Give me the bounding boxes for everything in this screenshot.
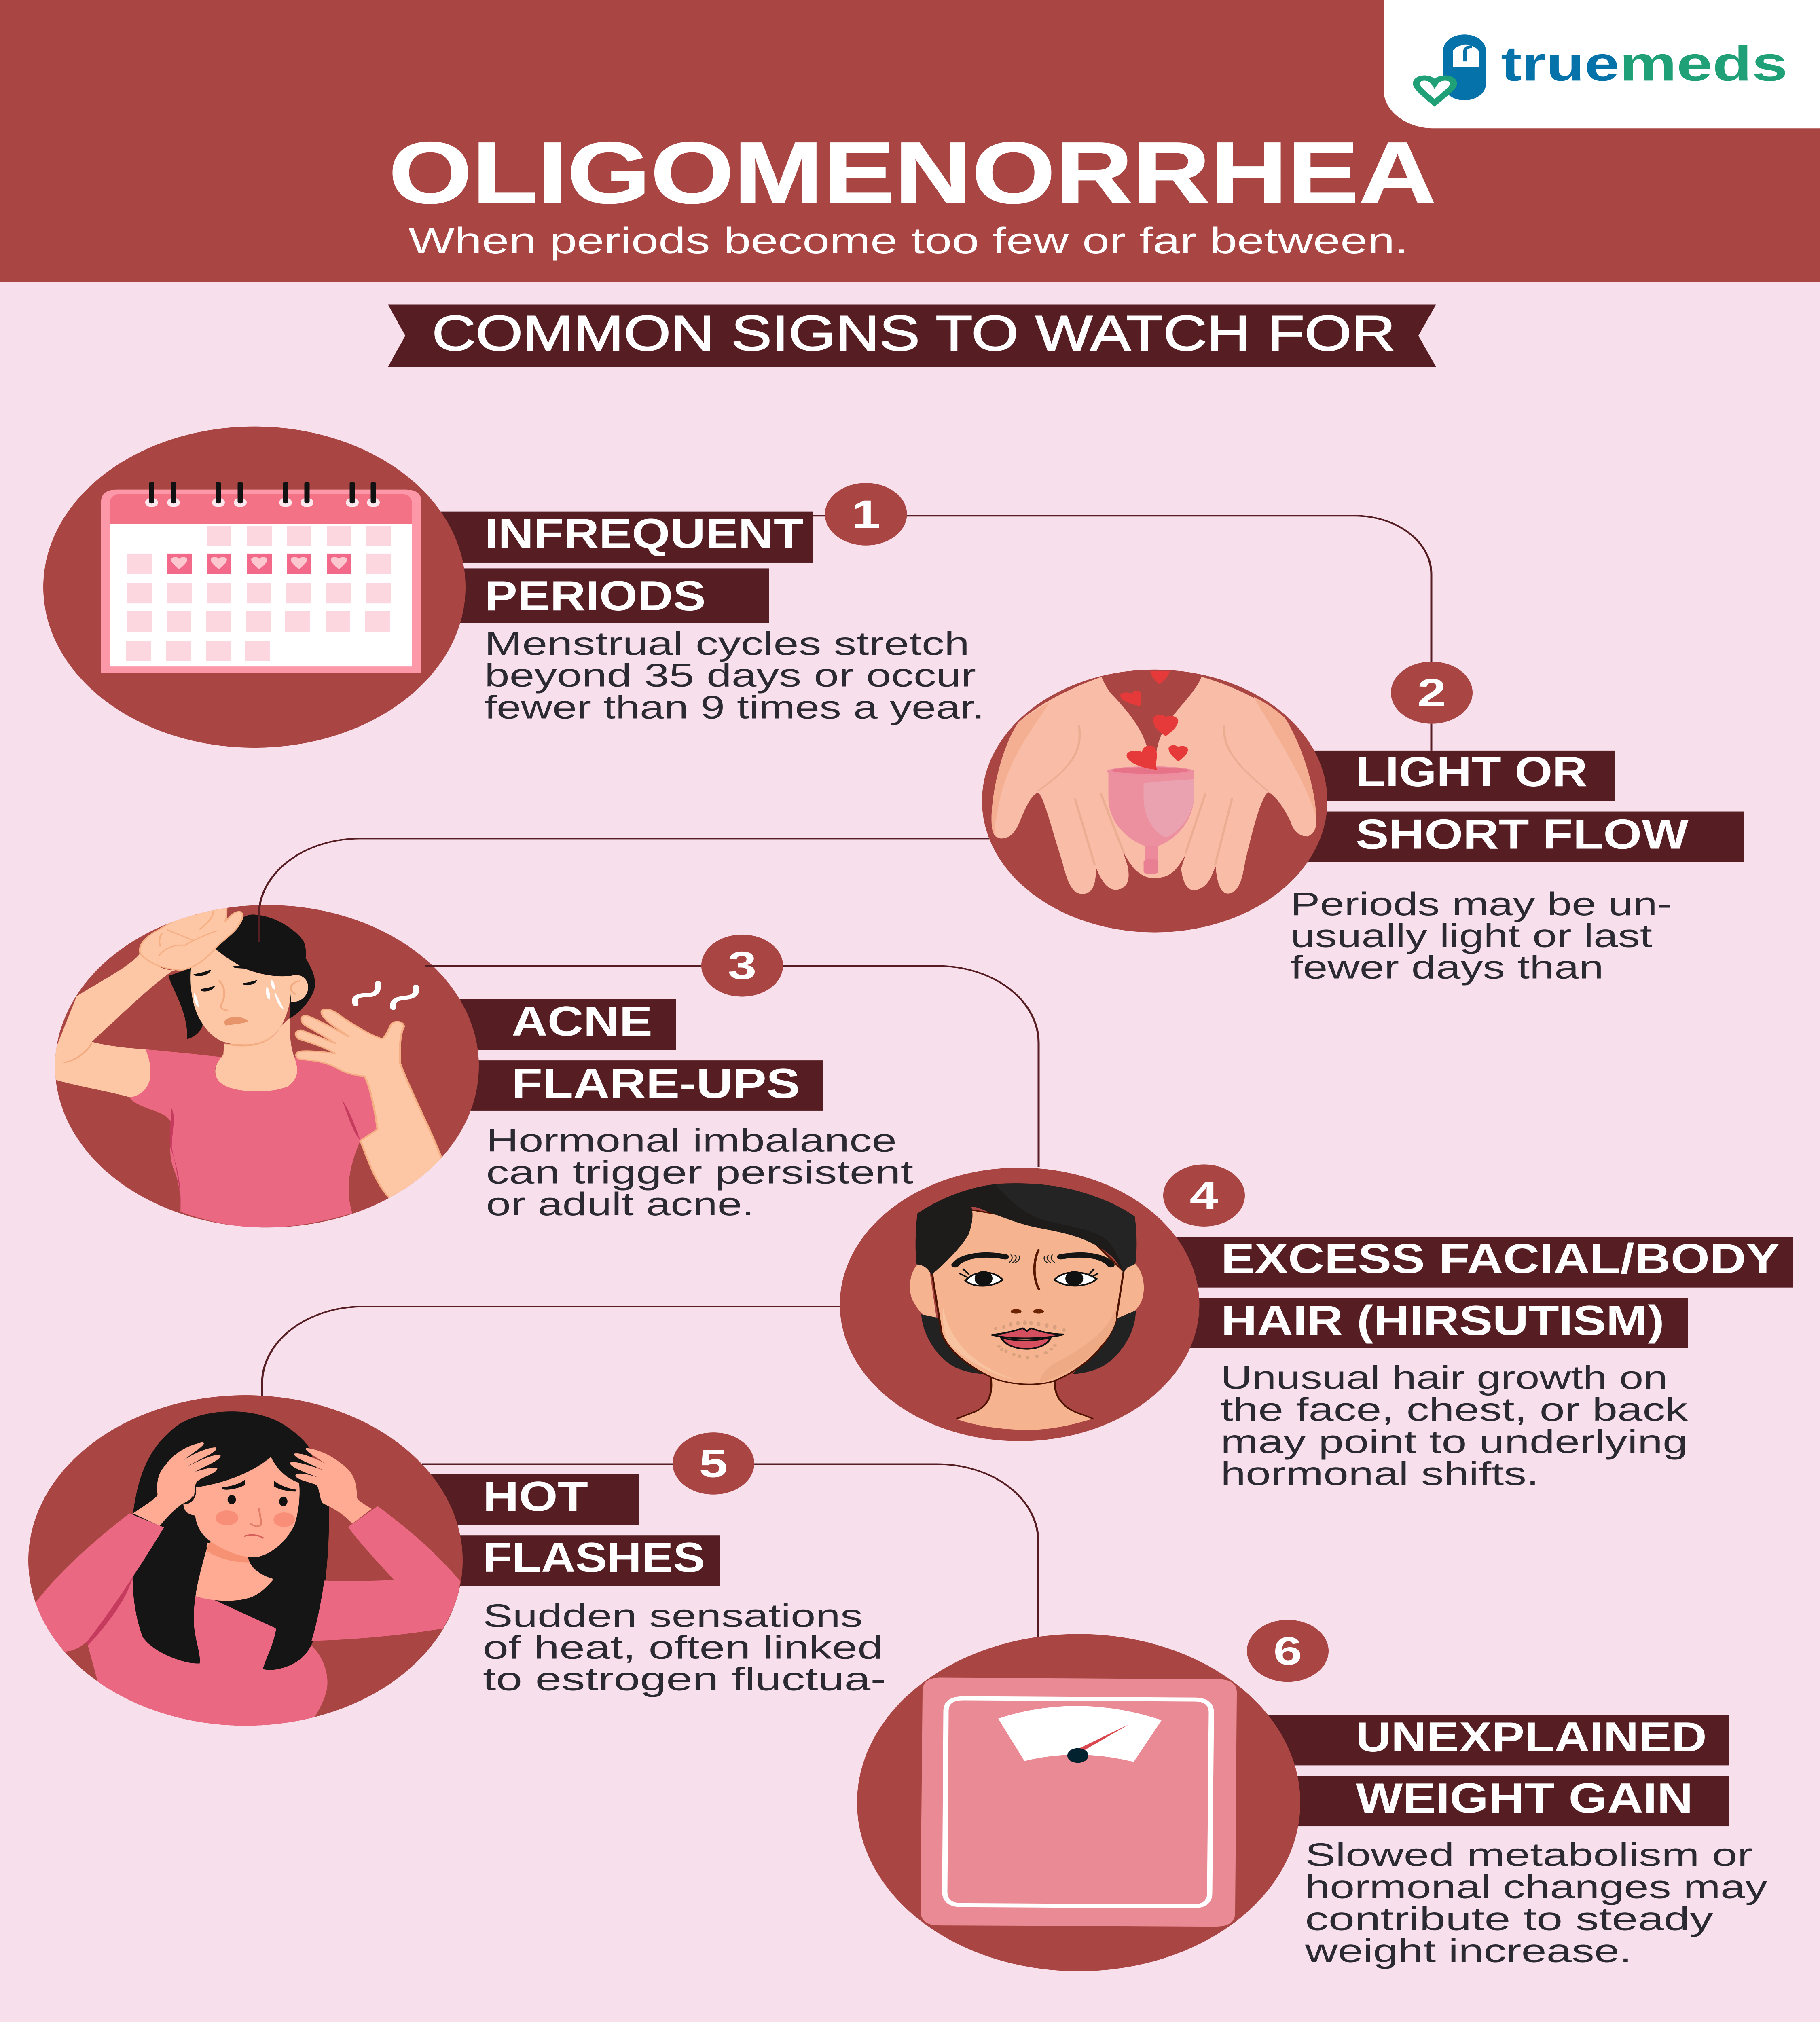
- description: Unusual hair growth on: [1221, 1359, 1668, 1396]
- description: Sudden sensations: [483, 1597, 863, 1634]
- description: fewer than 9 times a year.: [485, 689, 984, 725]
- description: usually light or last: [1291, 918, 1652, 954]
- number badge 2: [1391, 662, 1473, 724]
- heading: UNEXPLAINED: [1356, 1714, 1707, 1760]
- description: fewer days than: [1291, 949, 1604, 986]
- description: [1305, 1836, 1767, 1969]
- illustration: woman holding her head: [36, 1411, 460, 1727]
- illustration: face with facial hair: [910, 1183, 1144, 1430]
- circle: [43, 427, 466, 748]
- logo wordmark: true: [1501, 36, 1619, 91]
- heading: WEIGHT GAIN: [1356, 1775, 1693, 1821]
- heading bars: [1254, 1715, 1729, 1826]
- logo wordmark: [1501, 36, 1788, 91]
- description: [486, 1122, 913, 1222]
- heading: LIGHT OR: [1356, 749, 1587, 795]
- heading: [1221, 1235, 1780, 1344]
- description: of heat, often linked: [483, 1629, 883, 1665]
- description: Slowed metabolism or: [1305, 1836, 1752, 1873]
- panel: hot flashes: [28, 1395, 886, 1727]
- heading bars: [445, 999, 823, 1111]
- number badge 2: 2: [1417, 671, 1446, 715]
- illustration: woman fanning herself: [55, 907, 442, 1228]
- description: [1291, 886, 1672, 986]
- description: hormonal shifts.: [1221, 1455, 1539, 1492]
- heading: HAIR (HIRSUTISM): [1221, 1297, 1664, 1344]
- circle: [982, 670, 1327, 933]
- section banner: [388, 305, 1436, 367]
- title: OLIGOMENORRHEA: [389, 124, 1436, 222]
- number badge 5: [673, 1432, 754, 1495]
- circle: [28, 1395, 463, 1726]
- icon: hands with menstrual cup: [992, 671, 1316, 894]
- description: Periods may be un-: [1291, 886, 1672, 922]
- description: contribute to steady: [1305, 1901, 1713, 1937]
- description: hormonal changes may: [1305, 1869, 1767, 1905]
- panel: acne flare-ups: [55, 905, 913, 1228]
- number badge 3: 3: [728, 944, 757, 988]
- panel: infrequent periods: [43, 427, 984, 748]
- description: [1221, 1359, 1688, 1492]
- panel: light or short flow: [982, 662, 1744, 986]
- description: [483, 1597, 886, 1697]
- icon: heart: [1416, 78, 1454, 103]
- heading: [1356, 749, 1689, 858]
- circle: [857, 1634, 1300, 1971]
- heading: [512, 998, 800, 1107]
- heading: EXCESS FACIAL/BODY: [1221, 1235, 1780, 1282]
- heading: [485, 510, 804, 619]
- heading bars: [440, 512, 813, 623]
- description: beyond 35 days or occur: [485, 657, 976, 694]
- icon: weighing scale: [921, 1678, 1237, 1927]
- heading: FLASHES: [483, 1534, 705, 1581]
- number badge 6: 6: [1273, 1629, 1302, 1673]
- number badge 5: 5: [699, 1442, 728, 1486]
- heading: PERIODS: [485, 573, 706, 619]
- heading: ACNE: [512, 998, 652, 1045]
- number badge 4: [1163, 1164, 1245, 1227]
- description: may point to underlying: [1221, 1423, 1688, 1459]
- description: can trigger persistent: [486, 1154, 913, 1191]
- panel: excess facial/body hair: [840, 1164, 1793, 1492]
- description: Menstrual cycles stretch: [485, 625, 969, 662]
- circle: [840, 1168, 1200, 1441]
- number badge 3: [701, 935, 783, 997]
- description: Hormonal imbalance: [486, 1122, 897, 1158]
- panel: unexplained weight gain: [857, 1620, 1767, 1971]
- banner heading: COMMON SIGNS TO WATCH FOR: [432, 306, 1395, 361]
- description: [485, 625, 984, 725]
- subtitle: When periods become too few or far between.: [408, 221, 1408, 261]
- heading: INFREQUENT: [485, 510, 804, 557]
- heading: HOT: [483, 1473, 588, 1520]
- circle: [55, 905, 479, 1227]
- description: or adult acne.: [486, 1186, 754, 1222]
- header band: [0, 0, 1820, 282]
- heading: SHORT FLOW: [1356, 811, 1689, 858]
- connector lines between steps: [259, 516, 1431, 1637]
- heading bars: [1305, 751, 1744, 862]
- icon: capsule: [1443, 34, 1486, 100]
- description: weight increase.: [1305, 1933, 1632, 1969]
- heading bars: [404, 1474, 720, 1586]
- heading: [483, 1473, 705, 1581]
- icon: calendar: [101, 484, 421, 673]
- number badge 1: 1: [851, 493, 880, 536]
- number badge 6: [1247, 1620, 1329, 1682]
- description: the face, chest, or back: [1221, 1391, 1688, 1428]
- number badge 1: [825, 483, 907, 546]
- heading: [1356, 1714, 1707, 1821]
- description: to estrogen fluctua-: [483, 1661, 886, 1697]
- number badge 4: 4: [1189, 1174, 1219, 1218]
- heading bars: [1173, 1237, 1793, 1348]
- logo panel: [1384, 0, 1820, 128]
- logo wordmark: meds: [1619, 36, 1788, 91]
- heading: FLARE-UPS: [512, 1060, 800, 1107]
